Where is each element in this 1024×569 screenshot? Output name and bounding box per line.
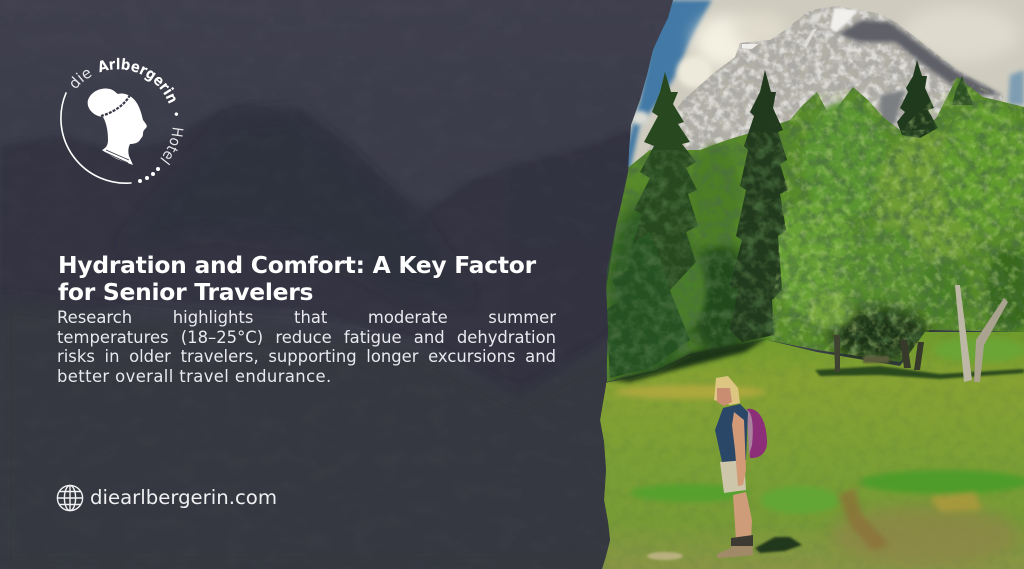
logo ring [61,93,131,183]
logo woman silhouette [88,89,147,165]
tree trunks [834,285,1008,382]
title: Hydration and Comfort: A Key Factor [58,251,536,279]
title [58,251,536,306]
body text [57,308,556,386]
logo lettering: Hotel [160,128,184,166]
photo: alpine landscape [600,0,1024,569]
logo [60,58,184,184]
conifers [606,60,1024,382]
hiker [714,376,802,558]
logo lettering: die [71,70,92,88]
body text: risks in older travelers, supporting longer excursions and [57,347,556,366]
website url: diearlbergerin.com [90,486,277,509]
sky and clouds [600,0,1024,200]
logo lettering: • [174,112,178,116]
body text: temperatures (18–25°C) reduce fatigue and dehydration [57,328,556,347]
title: for Senior Travelers [58,278,313,306]
logo lettering: Arlbergerin [99,58,176,104]
logo lettering [71,58,184,166]
dark mountain backdrop [1,104,631,568]
body text: better overall travel endurance. [57,367,332,386]
meadow [600,332,1024,569]
mountain [640,6,1003,190]
body text: Research highlights that moderate summer [57,308,556,327]
icon: globe [57,485,83,511]
forest mass [606,77,1024,382]
logo stars [138,167,160,183]
panel: dark torn-edge overlay [0,0,680,569]
